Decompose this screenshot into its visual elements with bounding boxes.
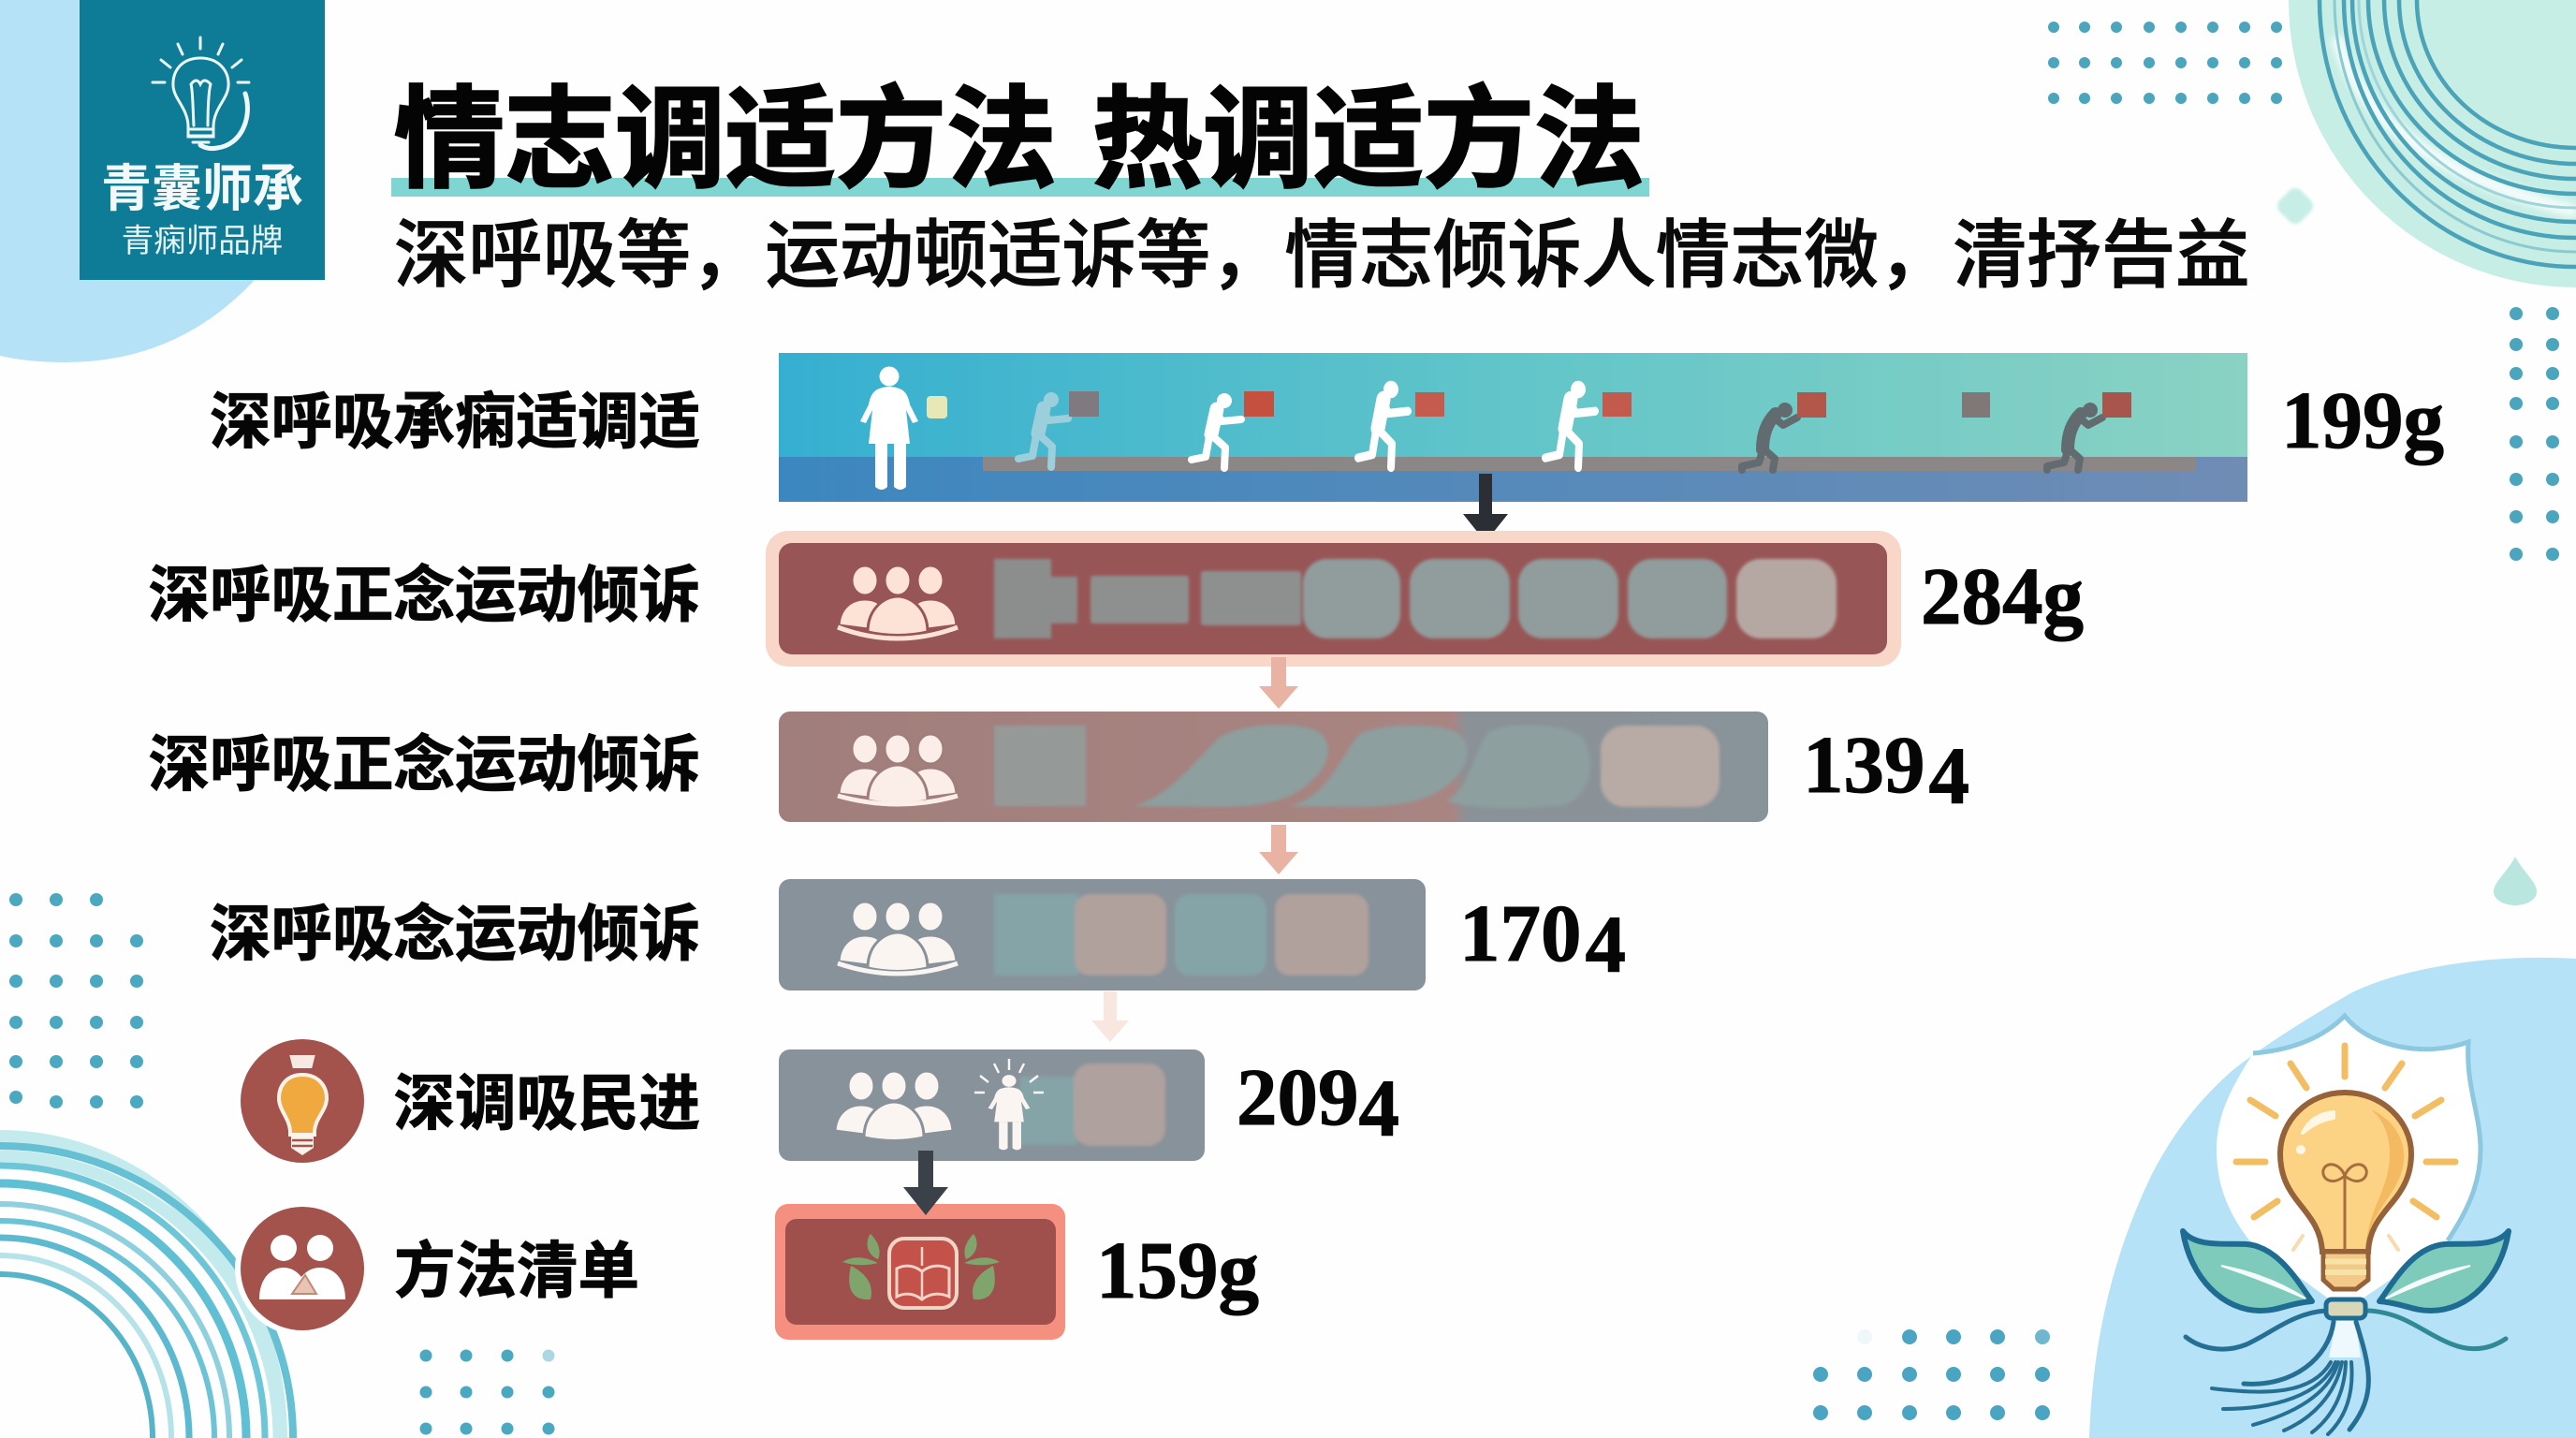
number: row 3: 4 (1928, 730, 1969, 821)
figure and box 2 (1192, 391, 1274, 468)
number: row 6: 159g (1096, 1225, 1259, 1315)
decoration: bottom-middle dot grid (1813, 1329, 2050, 1420)
icon: people group (835, 1071, 953, 1140)
decoration: top-right dot grid (2048, 22, 2282, 104)
number: row 5: 209 (1237, 1051, 1359, 1142)
icon: standing person (860, 367, 918, 490)
figure and box 4 (1545, 381, 1632, 468)
decoration: mint droplet (2494, 857, 2537, 905)
dark arrow 5 (903, 1151, 948, 1215)
number: row 4: 170 (1459, 888, 1582, 978)
figure and box 6 (2047, 392, 2131, 470)
label: row 1: 深呼吸承痫适调适 (210, 388, 700, 456)
label: row 4: 深呼吸念运动倾诉 (210, 900, 700, 968)
tiles (994, 725, 1720, 808)
logo name: 青囊师承 (101, 161, 303, 217)
row 3 bar (779, 712, 1768, 822)
label: row 5: 深调吸民进 (393, 1069, 700, 1137)
decoration: top-left blue blob (0, 0, 325, 362)
decoration: bottom-left dot grid (419, 1350, 554, 1434)
root glow (2329, 1320, 2361, 1357)
label: row 3: 深呼吸正念运动倾诉 (148, 730, 700, 799)
row 4 bar (779, 879, 1426, 990)
label: row 6: 方法清单 (394, 1237, 639, 1305)
decoration: mint diamond (2274, 184, 2317, 227)
icon: people group (838, 565, 958, 638)
decoration: right dot column (2510, 307, 2559, 561)
decoration: top-right concentric circle (2289, 0, 2576, 287)
icon: people group (838, 902, 958, 974)
icon: people badge (235, 1201, 370, 1336)
bulb glass (2280, 1093, 2411, 1252)
label: row 2: 深呼吸正念运动倾诉 (148, 561, 700, 629)
number: row 2: 284g (1921, 550, 2084, 641)
filament (2323, 1165, 2366, 1252)
decoration: left dot grid (9, 893, 143, 1108)
subtitle: 深呼吸等，运动顿适诉等，情志倾诉人情志微，清抒告益 (394, 213, 2249, 297)
icon: book emblem with leaves (842, 1234, 1000, 1308)
bulb base (2323, 1252, 2368, 1289)
number: row 1: 199g (2281, 374, 2444, 465)
row 6 bar (775, 1204, 1065, 1340)
rays (2236, 1046, 2455, 1250)
icon: note card (927, 396, 947, 418)
figure and box 3 (1358, 381, 1444, 468)
pink arrow 3 (1259, 825, 1298, 874)
title underline (391, 178, 1649, 197)
icon: people group (838, 734, 958, 804)
tiles (1020, 1064, 1165, 1146)
tiles (994, 894, 1368, 976)
knot (2326, 1299, 2365, 1318)
right leaf (2379, 1231, 2509, 1311)
shield outline (2253, 1016, 2481, 1240)
tiles (994, 559, 1837, 638)
shield (2217, 1016, 2481, 1311)
logo panel (80, 0, 325, 280)
faint arrow 4 (1091, 991, 1129, 1042)
roots (2186, 1311, 2506, 1434)
left leaf (2183, 1231, 2312, 1311)
icon: person with rays (974, 1059, 1044, 1150)
icon: logo light bulb (153, 37, 249, 149)
decoration: bottom-right blue blob (2089, 958, 2576, 1438)
icon: bulb badge (235, 1034, 370, 1168)
number: row 3: 139 (1803, 719, 1925, 810)
number: row 4: 4 (1586, 899, 1626, 990)
logo tagline: 青痫师品牌 (122, 224, 283, 259)
row 2 bar (766, 531, 1901, 667)
number: row 5: 4 (1359, 1063, 1399, 1153)
illustration: bulb with shield and leaves (2183, 1016, 2509, 1434)
pink arrow 2 (1259, 657, 1298, 709)
figure and box 1 (1018, 391, 1099, 467)
title: 情志调适方法 热调适方法 (394, 79, 1645, 202)
decoration: bottom-left concentric rings (0, 1137, 293, 1438)
row 1 bar (779, 353, 2247, 502)
figure and box 5 (1742, 392, 1826, 470)
lone box (1962, 392, 1990, 418)
row 5 bar (779, 1049, 1205, 1161)
dark arrow 1 (1463, 474, 1508, 542)
